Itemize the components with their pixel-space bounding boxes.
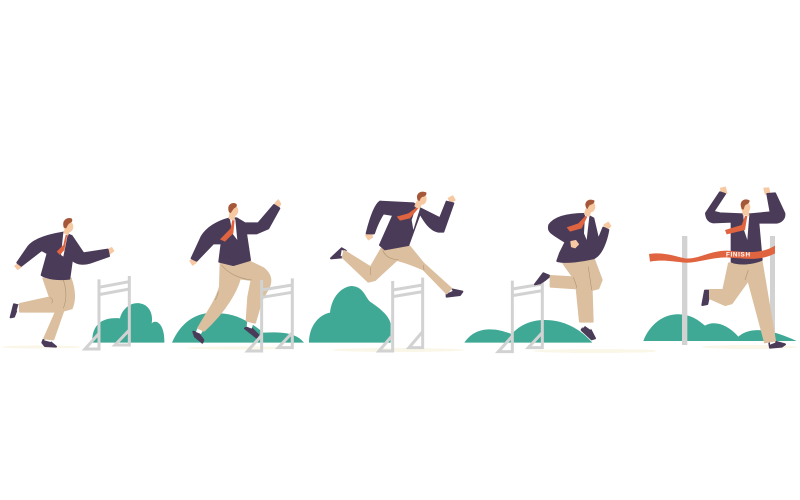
shirt [412,205,420,230]
hair [586,200,594,209]
hurdle 3 [379,278,423,351]
trouser folds [50,280,66,308]
shoes [535,273,595,339]
runner 2 [190,200,281,343]
hands [721,187,770,195]
jacket [192,205,279,265]
hand on jacket [571,241,578,248]
ground shadows [1,345,798,353]
trousers [551,258,602,322]
hair [417,192,426,201]
trousers [198,261,270,331]
hair [741,200,749,209]
left post [682,236,687,345]
right post [770,236,775,343]
bush 3 [309,286,391,343]
hands [15,248,114,269]
bush 2 [172,313,304,343]
shoes [331,248,462,297]
jacket [17,233,109,279]
sock [770,339,775,345]
trousers [343,245,451,293]
finish line [649,187,785,348]
runner 4 [535,200,611,339]
trouser folds [371,250,424,275]
hands [190,200,281,265]
back shoe [11,304,18,317]
socks [582,323,591,330]
head [742,202,750,212]
runner 5 [702,187,785,348]
hands [366,196,455,240]
trousers [20,278,74,339]
bush 5 [643,314,797,341]
tie [725,216,747,234]
runner 3 [331,192,462,297]
tie [57,235,67,255]
jacket [549,214,608,262]
tie [220,220,235,242]
head [65,222,73,232]
jacket [706,192,784,263]
trouser fold [745,270,748,280]
shirt [61,233,68,257]
shoes [702,291,785,348]
shirt [584,215,589,240]
tie [397,207,418,221]
shirt [230,219,237,240]
socks [196,321,254,334]
hurdle 2 [248,278,292,351]
runner 1 [11,218,114,347]
tie [567,216,587,232]
head [418,194,426,204]
bush 1 [92,303,164,343]
jacket [367,202,453,249]
front shoe [42,340,56,347]
shoes [193,327,258,343]
trouser folds [573,267,592,290]
head [230,206,238,216]
head [587,202,595,212]
hair [64,218,72,228]
hand [604,222,611,229]
hair [229,203,237,213]
trousers [710,262,775,342]
hurdle 1 [85,276,129,349]
ribbon label: FINISH [726,251,751,258]
socks [17,305,53,342]
ribbon [649,246,775,263]
shirt [743,214,749,240]
bushes [92,286,797,343]
bush 4 [464,320,592,343]
socks [341,250,453,293]
hurdle 4 [498,277,542,352]
trouser folds [215,265,252,300]
